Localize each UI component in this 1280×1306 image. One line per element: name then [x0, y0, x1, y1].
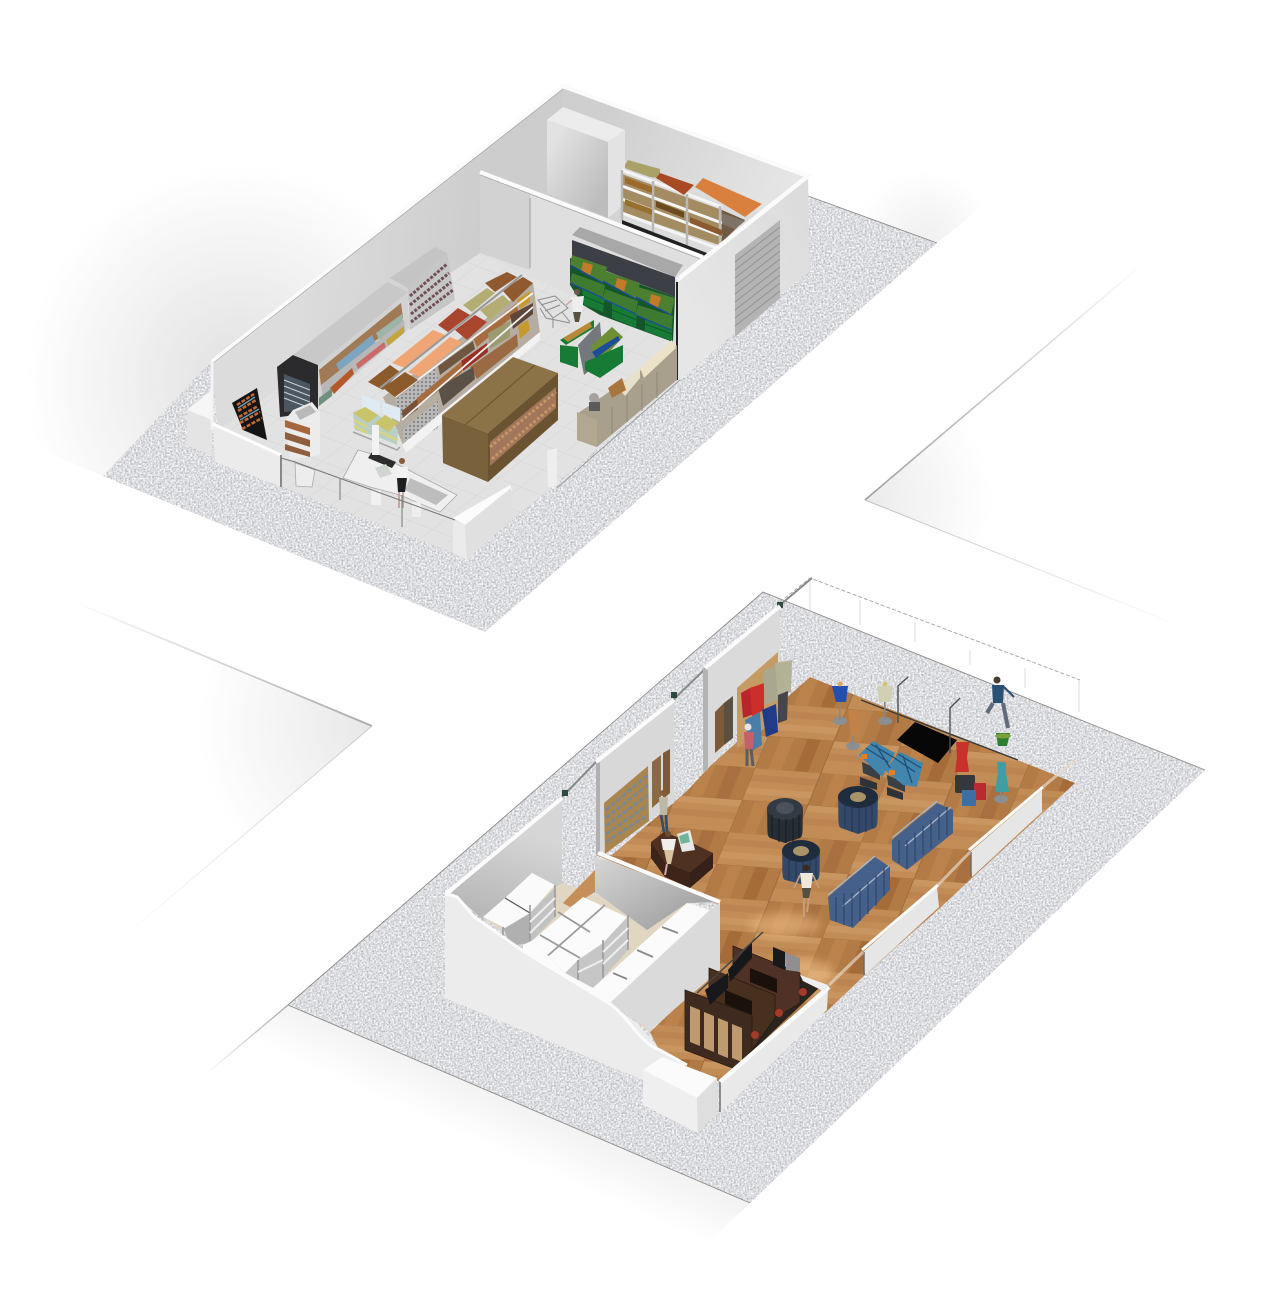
post: entry pillar	[547, 448, 557, 487]
edge: rear floor strip	[861, 700, 1018, 760]
glass: checkout rail	[281, 458, 455, 527]
glass: facade panes	[829, 760, 1075, 985]
checkout: cash desk with scanner	[343, 425, 457, 517]
ground: lower store gravel	[288, 592, 1205, 1203]
beams: upper track	[562, 578, 812, 797]
edge: gravel outlines	[288, 196, 1205, 1203]
floor: wood strip	[563, 870, 595, 907]
wall: right exterior with rim	[212, 86, 810, 380]
person: walking man rear	[987, 676, 1014, 728]
wall: front low wall	[720, 975, 829, 1113]
wall: rear sales wall	[703, 606, 780, 772]
goods: carton stack	[353, 395, 400, 450]
shelf: centre rack	[533, 897, 628, 988]
person: shopper with cart	[565, 289, 584, 322]
counter: rustic wooden produce island	[442, 357, 558, 482]
shelving: back room racks	[622, 160, 762, 258]
icon: shopping cart	[538, 296, 570, 328]
floor: storage tan floor	[483, 883, 687, 1032]
mannequins: rear and side displays	[832, 682, 1011, 803]
panel: clothing store	[445, 578, 1080, 1133]
wall: partition face	[595, 858, 720, 930]
counter: brown till desk	[651, 830, 713, 888]
wall: front left block	[187, 362, 282, 487]
shelf: small bread rack	[285, 402, 320, 487]
shelf: white front strip	[523, 940, 610, 1003]
person: cashier	[396, 458, 408, 508]
rooms: wooden changing cabins	[685, 932, 820, 1070]
shelf: left rack	[483, 873, 555, 946]
wall: curved front facade	[445, 895, 687, 1080]
storage: back of house room	[445, 798, 720, 1080]
ground: upper store gravel	[103, 86, 937, 632]
gondola: central shelving	[353, 272, 540, 453]
fixture: jeans rail upper	[892, 801, 953, 870]
person: staff at till	[661, 831, 676, 875]
shadow: upper store	[0, 0, 563, 476]
shadow: lower store ground	[205, 1005, 750, 1250]
block: front corner pier	[643, 1057, 717, 1133]
shadow: road block right	[865, 262, 1280, 680]
person: man by shoe wall	[659, 790, 668, 832]
shelf: green vegetable displays	[570, 227, 683, 342]
wall: low facade segment centre	[862, 885, 939, 975]
glass: rear balustrade	[780, 578, 1080, 712]
clothing: wall hung garments	[741, 660, 792, 752]
wall: low facade segment right	[969, 787, 1043, 877]
clothing: side rail with bags	[955, 775, 986, 806]
wall: partition right face	[610, 903, 720, 1030]
goods: top row produce	[368, 272, 533, 397]
shadow: upper store right side	[808, 100, 1012, 243]
fixture: round jeans rack right	[838, 786, 878, 834]
person: man by rails	[744, 724, 754, 766]
shelf: wall bench	[593, 903, 710, 1003]
fridge: second chiller	[390, 247, 455, 330]
wall: internal partition	[480, 172, 703, 345]
fixture: round jeans rack front	[782, 840, 820, 884]
fixture: blue jacket rails	[859, 741, 923, 800]
floor: grey tiles	[218, 253, 680, 558]
icon: rolling shutter door	[735, 220, 780, 337]
fixture: round jeans rack dark	[767, 798, 803, 843]
shadow: road block left	[0, 585, 372, 1000]
wall: front right stub	[453, 485, 512, 560]
light: floor highlights	[750, 913, 833, 991]
crates: produce top rows	[570, 255, 675, 330]
shelf: centre produce stand	[560, 320, 623, 378]
wall: long left wall	[212, 86, 563, 430]
wall: storage rear inner	[452, 799, 562, 920]
fridge: long open chiller	[293, 282, 410, 407]
fixture: black display table	[897, 722, 957, 763]
room: back storage	[547, 88, 805, 258]
fixture: jeans rail lower	[828, 856, 890, 928]
rack: tilted confectionery stand	[232, 388, 267, 440]
floor: herringbone parquet	[596, 677, 1075, 1082]
counter: glass deli case with boxes	[557, 340, 680, 488]
fixture: rear hanging rails	[898, 677, 960, 753]
marks: bench brackets	[613, 927, 678, 979]
fridge: black drinks cooler	[277, 355, 318, 417]
wall: middle wall	[596, 700, 674, 856]
panel: grocery store	[187, 86, 810, 560]
person: woman walking	[794, 864, 819, 917]
floor: dark behind cabins	[735, 975, 820, 1063]
